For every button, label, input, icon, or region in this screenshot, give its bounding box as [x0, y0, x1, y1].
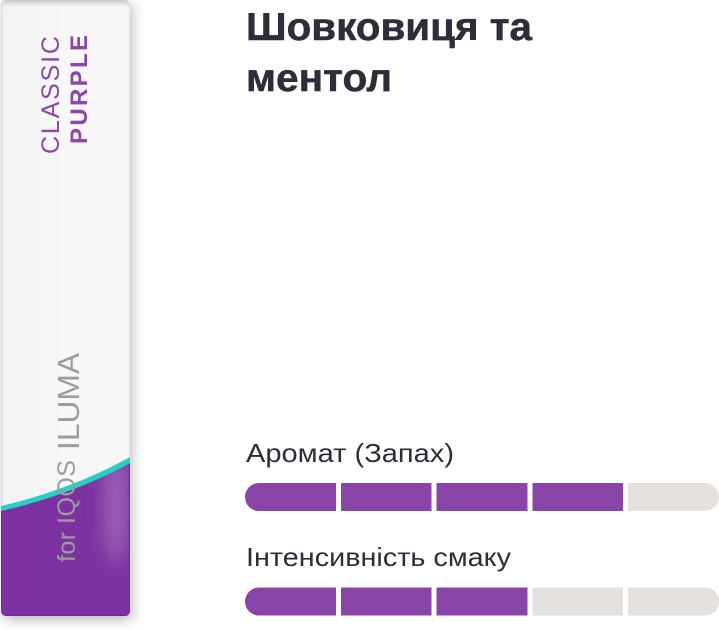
- pack label: classic purple: [37, 35, 93, 154]
- aroma label: Аромат (Запах): [246, 438, 454, 468]
- intensity label: Інтенсивність смаку: [246, 542, 511, 572]
- title: ментол: [246, 57, 392, 100]
- intensity rating bar: 3 of 5: [245, 588, 719, 616]
- title: [246, 6, 532, 100]
- pack label: classic purple: PURPLE: [66, 35, 93, 144]
- title: Шовковиця та: [246, 6, 532, 49]
- pack label: for IQOS ILUMA: [51, 353, 86, 562]
- pack label: for IQOS ILUMA: for IQOS: [53, 460, 81, 562]
- aroma rating bar: 4 of 5: [245, 483, 719, 511]
- pack label: classic purple: CLASSIC: [37, 36, 65, 154]
- product pack: [1, 0, 133, 621]
- pack label: for IQOS ILUMA: ILUMA: [51, 353, 86, 450]
